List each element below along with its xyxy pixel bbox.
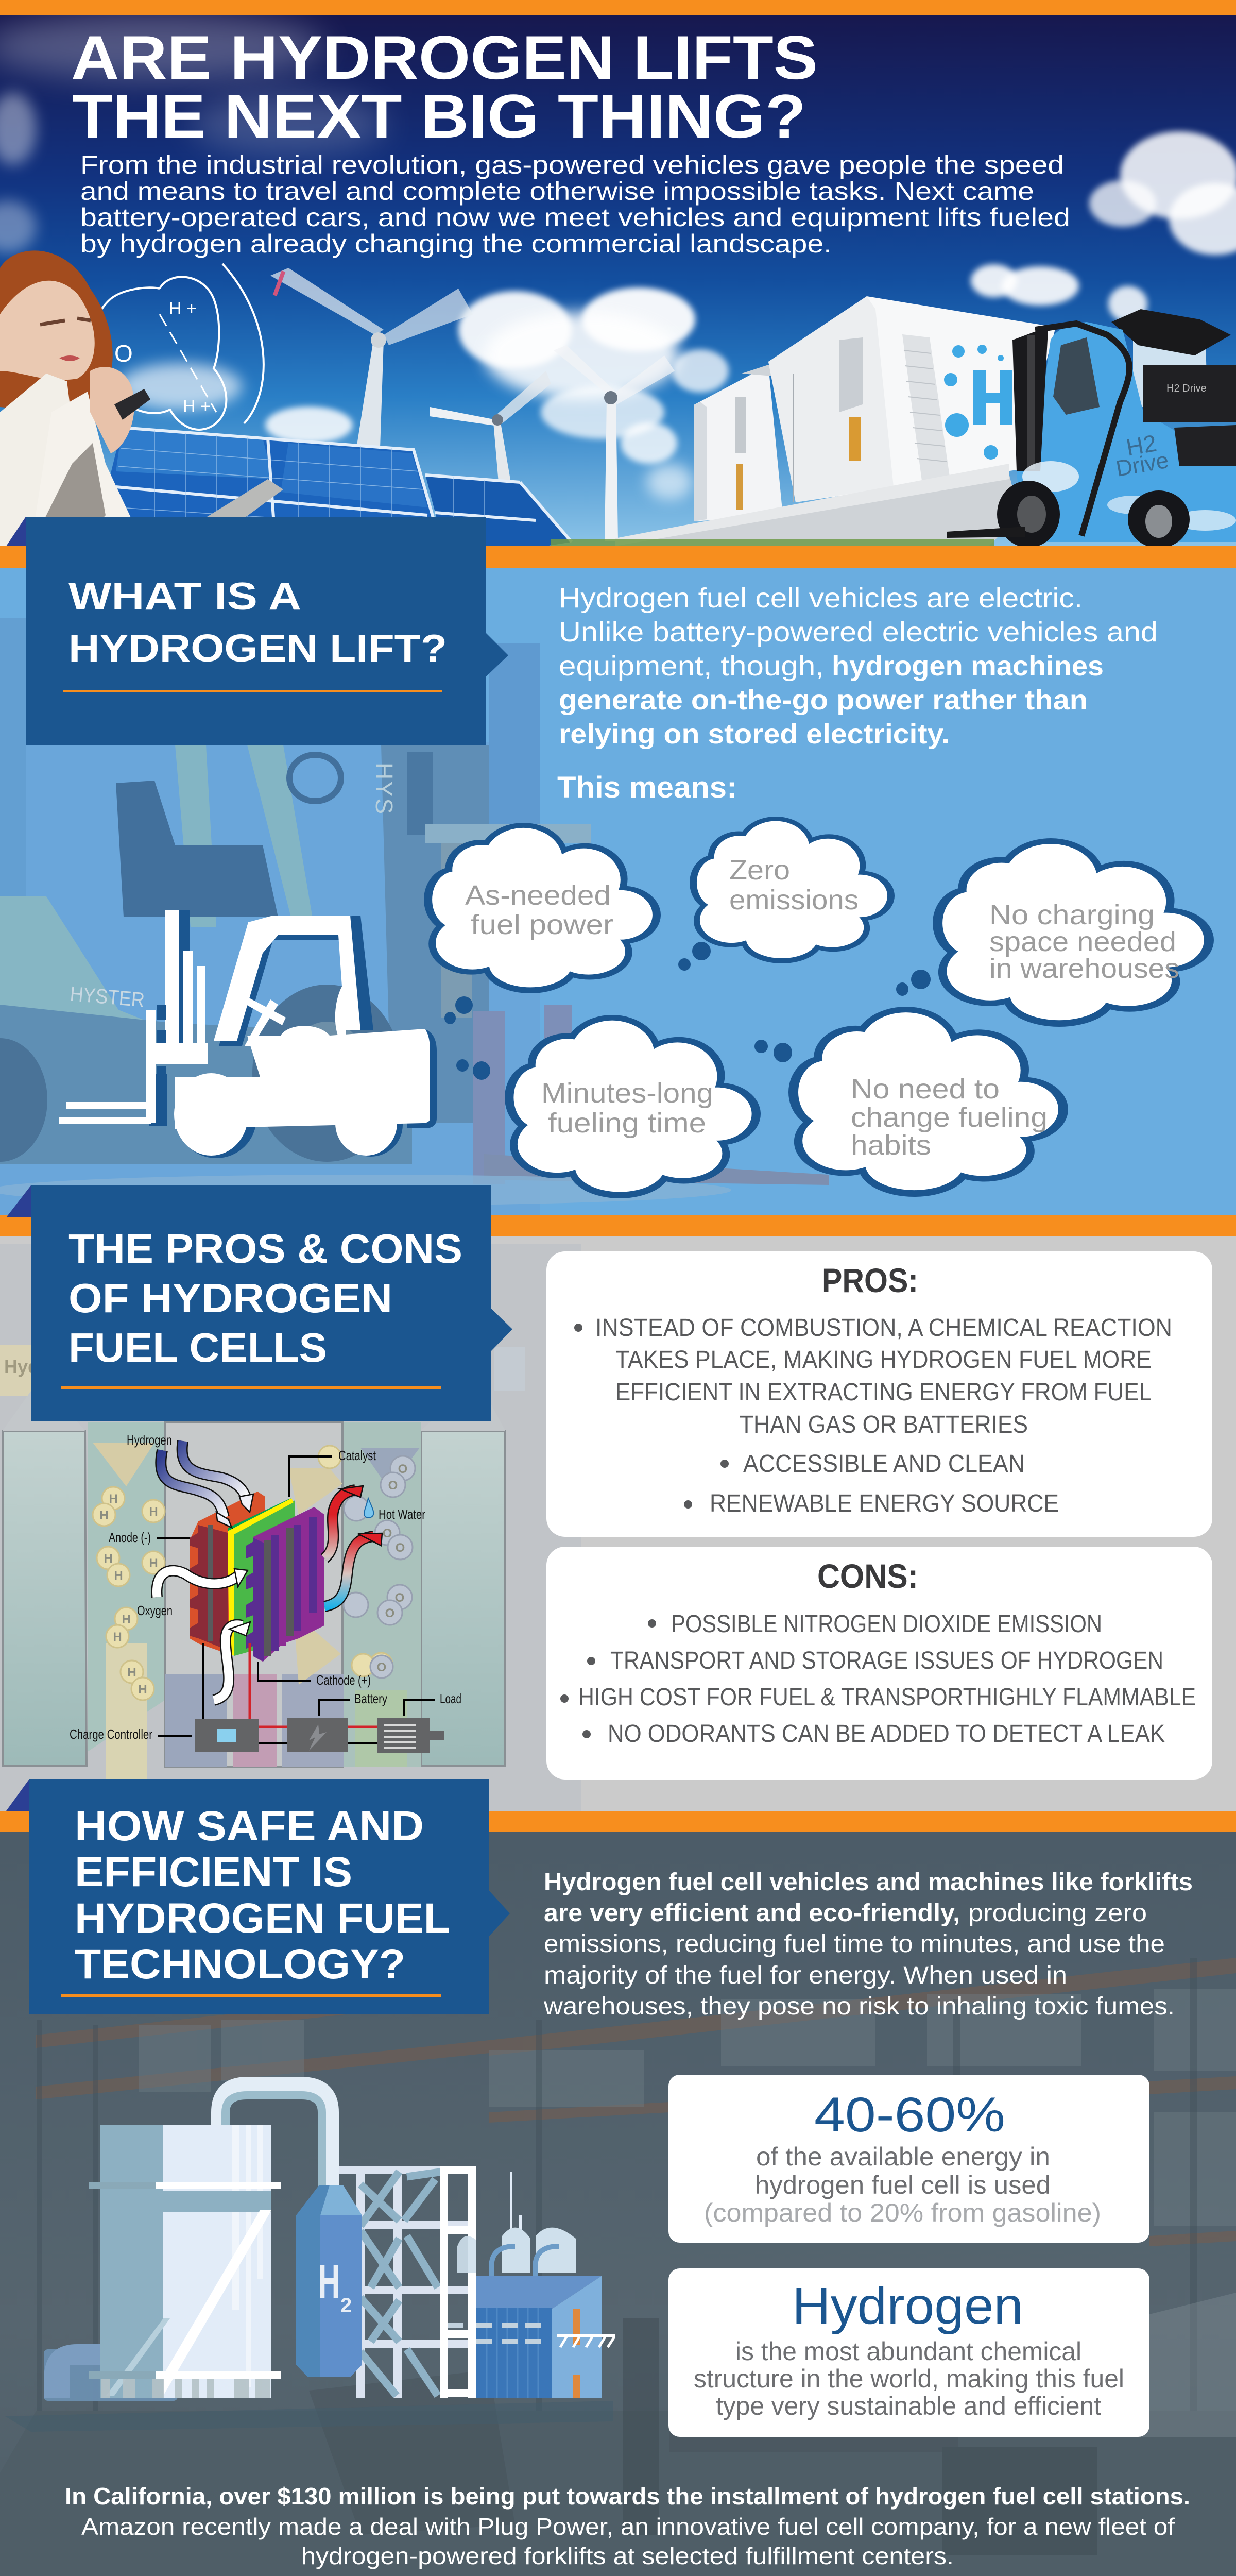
chart: fuel cell diagram: H — [109, 1492, 118, 1506]
panel: pros: RENEWABLE ENERGY SOURCE — [710, 1490, 1059, 1517]
illustration: hydrogen plant: H — [318, 2256, 340, 2308]
hot water drop — [364, 1498, 373, 1518]
solar panels — [93, 428, 572, 546]
orange band — [0, 1811, 1236, 1832]
diagram labels: Load — [440, 1691, 461, 1706]
text: california and amazon: Amazon recently made a deal with Plug Power, an innovative fuel cell company, for a new fleet of — [81, 2513, 1175, 2540]
heading box: what is a hydrogen lift: WHAT IS A — [68, 574, 301, 618]
molecule sketch — [92, 264, 264, 430]
diagram labels: Hot Water — [379, 1506, 425, 1522]
panel: pros: INSTEAD OF COMBUSTION, A CHEMICAL REACTION — [595, 1314, 1172, 1342]
pipe arch — [220, 2086, 330, 2215]
panel: cons: CONS: — [817, 1557, 918, 1595]
background forklift photo: HYSTER — [69, 982, 145, 1012]
heading box: what is a hydrogen lift — [6, 517, 508, 745]
card: hydrogen: is the most abundant chemical — [735, 2337, 1082, 2366]
text: what is a hydrogen lift: relying on stored electricity. — [559, 719, 950, 750]
panel: what is a hydrogen lift — [0, 568, 1236, 1215]
heading box: pros and cons — [6, 1185, 512, 1421]
fuel cell stack — [190, 1492, 324, 1662]
text: efficiency description: producing zero — [968, 1900, 1147, 1927]
card: 40-60%: hydrogen fuel cell is used — [755, 2171, 1051, 2199]
chart: fuel cell diagram: O — [377, 1660, 386, 1674]
cloud: no need to change fueling habits — [788, 1007, 1068, 1197]
cab — [1017, 322, 1236, 542]
hydrogen forklift: Drive — [1114, 448, 1171, 482]
panel: cons — [546, 1547, 1212, 1780]
card: 40-60%: of the available energy in — [756, 2142, 1050, 2171]
sky clouds — [0, 13, 1236, 500]
cloud: no charging space: in warehouses — [989, 953, 1179, 984]
diagram labels: Oxygen — [137, 1603, 173, 1618]
machinery block — [510, 2172, 512, 2239]
cloud: no need to change fueling habits: change fueling — [851, 1102, 1048, 1133]
hydrogen forklift: H2 — [1124, 429, 1159, 461]
flow arrows — [157, 1441, 373, 1700]
chart: fuel cell diagram: O — [388, 1479, 398, 1493]
card: hydrogen — [668, 2268, 1149, 2437]
engine block — [1143, 365, 1236, 422]
background forklift photo — [0, 618, 829, 1215]
card: hydrogen: Hydrogen — [792, 2277, 1023, 2335]
card: 40-60%: 40-60% — [814, 2088, 1005, 2142]
text: california and amazon: hydrogen-powered forklifts at selected fulfillment centers. — [301, 2543, 954, 2569]
cloud: no charging space — [933, 838, 1214, 1027]
intro text: by hydrogen already changing the commercial landscape. — [80, 229, 832, 258]
title: ARE HYDROGEN LIFTS — [71, 23, 818, 92]
tanks and flow arrows — [3, 1391, 505, 1811]
background forklift photo: HYS — [371, 762, 398, 814]
diagram labels: Cathode (+) — [316, 1672, 371, 1688]
hydrogen forklift — [947, 309, 1236, 548]
chart: fuel cell diagram: H — [149, 1505, 158, 1519]
title — [71, 23, 818, 151]
hydrogen forklift: H2 Drive — [1166, 383, 1207, 394]
card: hydrogen: structure in the world, making this fuel — [694, 2364, 1124, 2393]
cloud: minutes-long fueling time — [505, 1015, 761, 1198]
cloud: zero emissions: emissions — [729, 885, 859, 916]
chart: fuel cell diagram: H — [114, 1569, 123, 1583]
chart: fuel cell diagram: H — [113, 1630, 122, 1644]
chart: fuel cell diagram: O — [385, 1606, 394, 1620]
chart: fuel cell diagram: O — [398, 1462, 407, 1476]
components — [195, 1718, 444, 1753]
illustration: hydrogen plant: 2 — [340, 2294, 352, 2317]
diagram labels — [70, 1432, 461, 1742]
card: 40-60%: (compared to 20% from gasoline) — [704, 2198, 1101, 2227]
heading box: how safe and efficient — [6, 1779, 510, 2014]
cloud: minutes-long fueling time: Minutes-long — [541, 1078, 713, 1109]
scaffold — [339, 2166, 476, 2398]
chart: fuel cell diagram: H — [122, 1613, 131, 1626]
H2 column — [296, 2185, 362, 2377]
title: THE NEXT BIG THING? — [72, 82, 806, 151]
molecule sketch: O — [114, 340, 133, 367]
text: efficiency description: Hydrogen fuel cell vehicles and machines like forklifts — [544, 1869, 1193, 1896]
text: efficiency description — [543, 1869, 1193, 2020]
text: what is a hydrogen lift: This means: — [557, 771, 737, 804]
panel: pros: TAKES PLACE, MAKING HYDROGEN FUEL MORE — [615, 1346, 1152, 1374]
diagram labels: Catalyst — [338, 1448, 376, 1463]
panel: pros — [546, 1251, 1212, 1537]
top orange band — [0, 0, 1236, 15]
woman — [0, 250, 283, 546]
chart: fuel cell diagram: O — [395, 1591, 404, 1605]
chart: fuel cell diagram: H — [138, 1683, 147, 1697]
intro text — [80, 150, 1070, 258]
panel: cons: TRANSPORT AND STORAGE ISSUES OF HYDROGEN — [610, 1647, 1163, 1674]
text: what is a hydrogen lift: Hydrogen fuel cell vehicles are electric. — [559, 583, 1083, 614]
cloud: zero emissions — [690, 817, 895, 963]
text: what is a hydrogen lift: equipment, though, — [559, 651, 824, 682]
cloud: as-needed fuel power: As-needed — [465, 880, 611, 911]
chart: fuel cell diagram: O — [383, 1527, 392, 1540]
leader lines and wires — [157, 1456, 435, 1743]
panel: pros: THAN GAS OR BATTERIES — [740, 1411, 1028, 1438]
text: what is a hydrogen lift — [557, 583, 1158, 804]
mast — [1012, 328, 1048, 471]
text: efficiency description: warehouses, they pose no risk to inhaling toxic fumes. — [543, 1993, 1175, 2020]
chart: fuel cell diagram: O — [396, 1541, 405, 1555]
warehouse photo — [0, 1958, 1236, 2576]
battery containers — [551, 296, 1056, 546]
heading box: pros and cons: OF HYDROGEN — [68, 1275, 392, 1321]
panel: pros: PROS: — [822, 1261, 918, 1299]
heading box: pros and cons: THE PROS & CONS — [68, 1226, 462, 1272]
cloud: no need to change fueling habits: habits — [851, 1130, 931, 1161]
orange band — [0, 1215, 1236, 1236]
chart: fuel cell diagram: H — [104, 1552, 113, 1566]
panel: pros and cons background — [0, 1236, 1236, 1811]
chart: fuel cell diagram: H — [99, 1509, 109, 1522]
diagram labels: Hydrogen — [127, 1432, 172, 1448]
cloud: as-needed fuel power — [424, 823, 661, 993]
heading box: how safe and efficient: HOW SAFE AND — [75, 1803, 424, 1850]
heading box: pros and cons: FUEL CELLS — [68, 1325, 327, 1370]
heading box: how safe and efficient: EFFICIENT IS — [75, 1849, 352, 1895]
text: california and amazon: In California, over $130 million is being put towards the installment of hydrogen fuel cell stations. — [65, 2483, 1190, 2510]
text: what is a hydrogen lift: generate on-the-go power rather than — [559, 685, 1088, 716]
illustration: hydrogen plant — [5, 2086, 615, 2432]
card: 40-60% — [668, 2075, 1149, 2243]
panel: hero — [0, 13, 1236, 548]
atom bubbles — [93, 1446, 392, 1700]
chart: fuel cell diagram — [0, 1244, 581, 1811]
cloud: zero emissions: Zero — [729, 855, 790, 886]
heading box: how safe and efficient: TECHNOLOGY? — [75, 1941, 405, 1988]
rear window sky — [1133, 341, 1206, 407]
text: what is a hydrogen lift: hydrogen machines — [832, 651, 1104, 682]
panel: pros: ACCESSIBLE AND CLEAN — [743, 1450, 1025, 1478]
logo: H — [944, 345, 1012, 460]
heading box: what is a hydrogen lift: HYDROGEN LIFT? — [68, 626, 447, 670]
thought dots — [444, 942, 931, 1080]
intro text: and means to travel and complete otherwise impossible tasks. Next came — [80, 177, 1034, 206]
icon: white forklift — [59, 910, 437, 1158]
text: what is a hydrogen lift: Unlike battery-powered electric vehicles and — [559, 617, 1158, 648]
heading box: how safe and efficient: HYDROGEN FUEL — [75, 1895, 450, 1942]
tank — [100, 2125, 163, 2398]
cloud: as-needed fuel power: fuel power — [471, 909, 613, 940]
cloud: minutes-long fueling time: fueling time — [548, 1108, 706, 1139]
intro text: battery-operated cars, and now we meet vehicles and equipment lifts fueled — [80, 203, 1070, 232]
orange band — [0, 546, 1236, 568]
diagram labels: Anode (-) — [109, 1530, 151, 1545]
panel: safety and efficiency background — [0, 1832, 1236, 2576]
molecule sketch: H + — [183, 397, 211, 416]
text: efficiency description: emissions, reducing fuel time to minutes, and use the — [544, 1930, 1165, 1958]
panel: pros: EFFICIENT IN EXTRACTING ENERGY FROM FUEL — [615, 1379, 1152, 1406]
wind turbines — [270, 268, 675, 541]
cloud: no need to change fueling habits: No need to — [851, 1074, 1000, 1105]
molecule sketch: H + — [169, 299, 197, 318]
text: efficiency description: majority of the fuel for energy. When used in — [544, 1962, 1067, 1989]
intro text: From the industrial revolution, gas-powered vehicles gave people the speed — [80, 150, 1064, 179]
diagram labels: Charge Controller — [70, 1726, 152, 1742]
cloud: no charging space: No charging — [989, 900, 1155, 930]
diagram labels: Battery — [354, 1691, 387, 1706]
card: hydrogen: type very sustainable and efficient — [716, 2392, 1101, 2420]
panel: cons: NO ODORANTS CAN BE ADDED TO DETECT A LEAK — [608, 1720, 1165, 1748]
chart: fuel cell diagram: Hyd — [4, 1356, 39, 1377]
text: california and amazon — [65, 2483, 1190, 2569]
roof — [1111, 309, 1231, 355]
chart: fuel cell diagram: H — [149, 1556, 158, 1570]
cloud: no charging space: space needed — [989, 926, 1176, 957]
chart: fuel cell diagram: H — [127, 1666, 136, 1680]
text: efficiency description: are very efficient and eco-friendly, — [544, 1900, 960, 1927]
panel: cons: POSSIBLE NITROGEN DIOXIDE EMISSION — [671, 1611, 1102, 1638]
